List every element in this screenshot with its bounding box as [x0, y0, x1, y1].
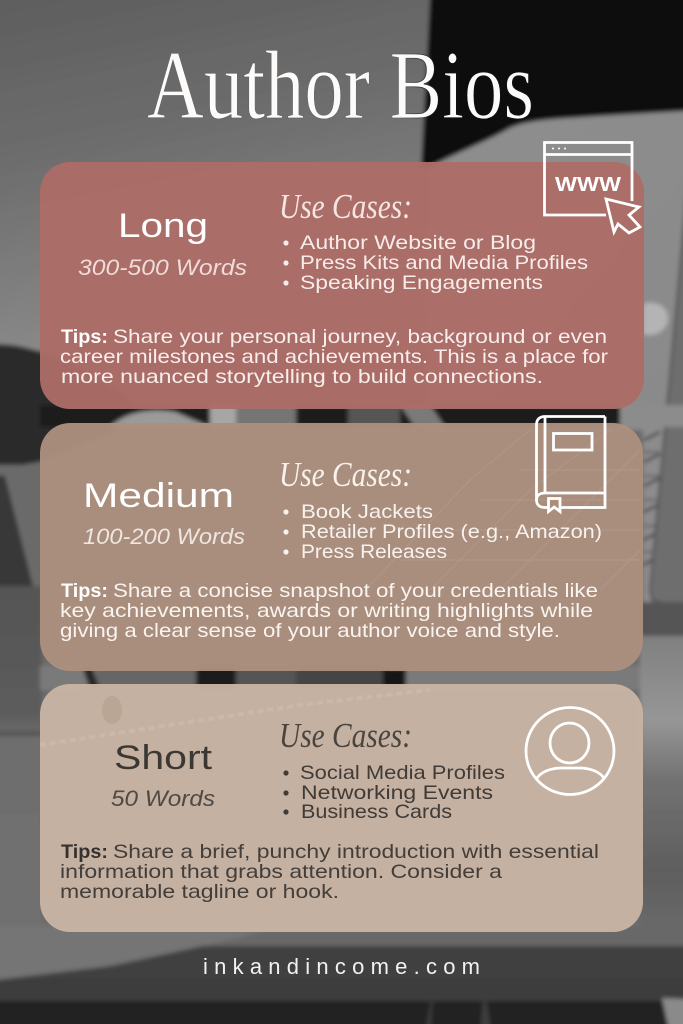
use case list: medium — [283, 501, 602, 563]
word count: short: 50 Words — [111, 786, 215, 811]
lower band behind footer — [0, 928, 683, 952]
use case list: short: Networking Events — [301, 782, 493, 804]
use case list: long: Author Website or Blog — [300, 232, 536, 254]
keyboard edge at right — [643, 420, 683, 605]
panel background: short — [40, 684, 643, 932]
tips: short: Tips: — [61, 841, 108, 863]
use cases heading: medium: Use Cases: — [279, 455, 412, 494]
tips: medium: giving a clear sense of your author voice and style. — [60, 620, 560, 642]
use case list: short: Business Cards — [301, 801, 452, 823]
use case list: long: Speaking Engagements — [300, 272, 543, 294]
icon: website window with cursor — [544, 142, 640, 233]
icon: website window with cursor: WWW — [555, 174, 621, 196]
use cases heading: long: Use Cases: — [279, 187, 412, 226]
icon: book — [536, 416, 605, 512]
tips: medium: Share a concise snapshot of your credentials like — [113, 580, 598, 602]
use case list: medium: Retailer Profiles (e.g., Amazon) — [301, 521, 602, 543]
website footer: inkandincome.com — [203, 954, 480, 979]
use case list: long: Press Kits and Media Profiles — [300, 252, 588, 274]
tips: medium: key achievements, awards or writing highlights while — [60, 600, 593, 622]
tips: long: Share your personal journey, background or even — [113, 326, 607, 348]
tips: long: more nuanced storytelling to build connections. — [61, 366, 543, 388]
word count: long: 300-500 Words — [78, 255, 247, 280]
tips: long — [60, 326, 609, 388]
tips: long: career milestones and achievements. This is a place for — [60, 346, 609, 368]
tips: short: memorable tagline or hook. — [60, 881, 339, 903]
tips: long: Tips: — [61, 326, 108, 348]
icon: person in circle — [526, 708, 614, 794]
use case list: short: Social Media Profiles — [300, 762, 505, 784]
tips: medium — [60, 580, 598, 642]
heading: Medium: Medium — [83, 477, 234, 515]
use cases heading: short: Use Cases: — [279, 716, 412, 755]
panel: medium bio — [40, 416, 643, 671]
use case list: medium: Press Releases — [301, 541, 447, 563]
tips: short — [60, 841, 599, 903]
tips: short: Share a brief, punchy introduction with essential — [113, 841, 599, 863]
panel background: long — [40, 162, 644, 409]
use case list: short — [283, 762, 505, 823]
use case list: long — [283, 232, 588, 294]
panel: short bio — [40, 684, 643, 932]
panel background: medium — [40, 423, 643, 671]
heading: Short: Short — [114, 739, 213, 777]
panel: long bio — [40, 142, 644, 409]
laptop screen wedge — [650, 160, 683, 612]
heading: Long: Long — [118, 207, 208, 245]
use case list: medium: Book Jackets — [301, 501, 433, 523]
tips: medium: Tips: — [61, 580, 108, 602]
tips: short: information that grabs attention. Consider a — [60, 861, 502, 883]
gap band under medium panel — [40, 666, 640, 690]
title: Author Bios — [147, 32, 534, 140]
word count: medium: 100-200 Words — [83, 524, 245, 549]
gap band under long panel — [40, 405, 640, 427]
